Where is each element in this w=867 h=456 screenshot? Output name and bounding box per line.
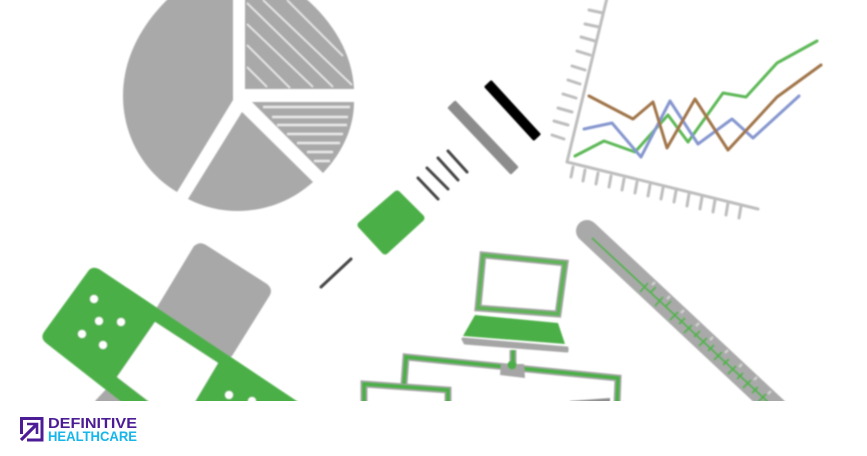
network lines [360, 349, 622, 401]
chart axes [552, 0, 758, 218]
icon: bandage [42, 243, 320, 440]
icon: line chart [552, 0, 821, 218]
bandage back strip [95, 243, 271, 420]
icon: syringe [321, 82, 539, 287]
green series [575, 41, 817, 156]
thermometer teeth [652, 282, 771, 394]
laptop base [463, 339, 567, 351]
logo mark [21, 418, 42, 440]
bandage pad [117, 322, 218, 410]
syringe graduation lines [418, 151, 467, 199]
network node top [570, 398, 610, 402]
logo wordmark top: DEFINITIVE [48, 415, 137, 432]
bandage holes [78, 295, 256, 405]
blue series [584, 96, 799, 157]
brown series [589, 65, 821, 150]
icon: pie chart [123, 0, 354, 211]
thermometer scale [592, 238, 768, 402]
icon: laptop network [364, 255, 618, 410]
syringe plunger rod [449, 102, 517, 173]
logo wordmark bottom: HEALTHCARE [48, 428, 137, 444]
network hub [500, 364, 525, 378]
bandage front strip [42, 266, 298, 401]
syringe needle [321, 259, 351, 287]
laptop screen [478, 255, 565, 314]
laptop keyboard [463, 315, 565, 344]
syringe barrel [361, 194, 421, 251]
thermometer tube [587, 231, 790, 421]
logo: Definitive Healthcare [21, 415, 137, 444]
syringe plunger head [486, 82, 539, 139]
icon: thermometer [587, 231, 790, 421]
